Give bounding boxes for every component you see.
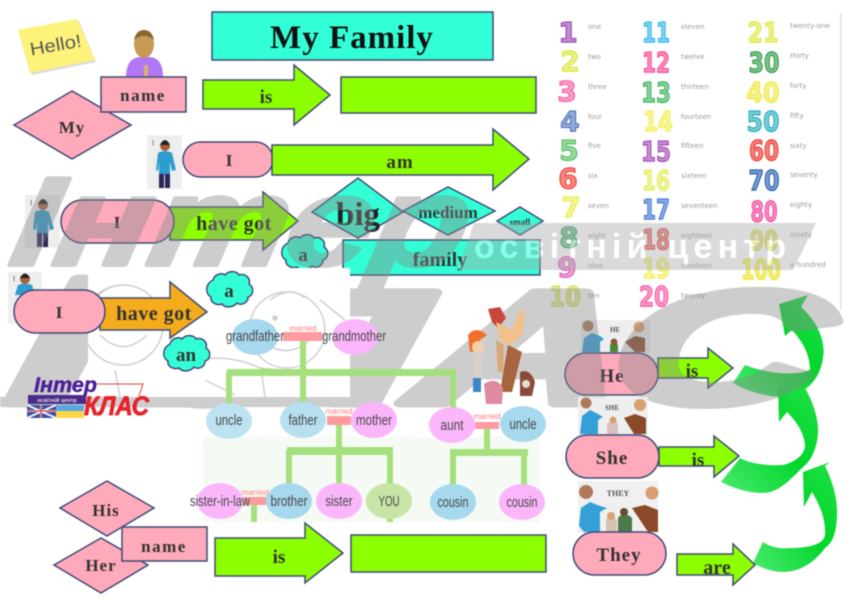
numbers: 21 to 100: ninety (790, 231, 812, 239)
numbers: 21 to 100: fifty (790, 112, 804, 120)
numbers: 21 to 100: seventy (790, 171, 818, 179)
arrow: is: is (260, 87, 272, 108)
number chart (549, 13, 842, 313)
node: YOU: YOU (378, 494, 400, 510)
numbers: 1 to 10: one (588, 23, 601, 31)
shape: I pill (14, 290, 105, 333)
numbers: 21 to 100: 90 (750, 224, 778, 257)
cloud: a: a (224, 281, 234, 302)
numbers: 21 to 100: 70 (748, 164, 780, 197)
cloud: an: an (176, 345, 196, 366)
numbers: 11 to 20: eleven (681, 23, 704, 31)
white backing of the baby sketch over the watermark (88, 268, 350, 397)
numbers: 11 to 20: 19 (642, 252, 670, 285)
picture: HE: HE (610, 326, 620, 334)
sticky note: Hello (18, 19, 96, 75)
node: uncle (500, 406, 546, 442)
cloud: a (207, 272, 253, 307)
numbers: 1 to 10: eight (588, 232, 606, 240)
icon: boy in blue (8, 272, 42, 324)
numbers: 11 to 20: 17 (642, 193, 670, 226)
numbers: 1 to 10: nine (588, 262, 603, 270)
numbers: 1 to 10: 2 (560, 45, 580, 78)
label: married: married (289, 324, 317, 333)
node: mother: mother (356, 413, 392, 429)
numbers: 21 to 100: eighty (790, 201, 812, 209)
picture: THEY (578, 481, 658, 533)
numbers: 11 to 20: 12 (642, 46, 670, 79)
numbers: 1 to 10: four (588, 113, 602, 121)
arrow: curved top (733, 295, 824, 397)
shape: I pill: I (226, 151, 233, 170)
shape: They pill (573, 532, 666, 575)
arrow: am (272, 129, 529, 190)
numbers: 1 to 10: two (588, 53, 601, 61)
arrow: have got (170, 192, 298, 250)
node: grandfather (226, 319, 284, 355)
picture: SHE: SHE (605, 404, 619, 412)
node: sister (316, 483, 362, 519)
numbers: 21 to 100: thirty (790, 52, 809, 60)
shape: name box (101, 77, 186, 112)
shape: He pill: He (599, 366, 625, 387)
numbers: 11 to 20: thirteen (681, 83, 709, 91)
numbers: 11 to 20: twenty (681, 292, 705, 300)
arrow: is: is (273, 547, 285, 568)
numbers: 21 to 100: 100 (741, 253, 781, 286)
node: uncle: uncle (216, 413, 242, 429)
numbers: 1 to 10: 4 (560, 105, 580, 138)
numbers: 1 to 10: 5 (559, 134, 579, 167)
watermark: Inter Klas: К ЛАС (0, 241, 852, 442)
numbers: 11 to 20: twelve (681, 53, 704, 61)
numbers: 21 to 100: sixty (790, 142, 807, 150)
arrow: is: is (692, 450, 704, 471)
watermark: Inter Klas (0, 151, 852, 442)
shape: My diamond (14, 91, 131, 159)
arrow: curved middle (721, 387, 818, 493)
pronoun: She (566, 397, 739, 478)
cloud: a (282, 235, 328, 270)
numbers: 21 to 100: 21 (748, 16, 778, 49)
node: sister: sister (326, 494, 353, 510)
icon: person with purple shirt (126, 30, 163, 77)
shape: Her diamond: Her (85, 556, 117, 575)
shape: name box: name (141, 537, 187, 556)
icon: boy in blue: I (13, 275, 16, 283)
icon: boy in blue: I (152, 139, 155, 147)
arrow: is (203, 65, 330, 125)
numbers: 11 to 20: 13 (641, 76, 671, 109)
shape: They pill: They (596, 545, 642, 566)
arrow: have got orange (100, 282, 207, 338)
numbers: 1 to 10 (549, 16, 609, 313)
node: cousin (499, 484, 545, 520)
numbers: 11 to 20: 11 (642, 16, 670, 49)
shape: family box (343, 240, 540, 275)
shape: small diamond: small (510, 217, 531, 227)
numbers: 11 to 20: 16 (642, 164, 670, 197)
icon: boy in blue (25, 195, 60, 248)
numbers: 21 to 100: a hundred (790, 261, 826, 269)
numbers: 1 to 10: 10 (549, 280, 581, 313)
pronoun: He (565, 320, 733, 395)
arrow: have got: have got (196, 213, 272, 235)
numbers: 1 to 10: 8 (559, 221, 579, 254)
watermark: Inter Klas: освітній центр (474, 228, 786, 266)
illustration: cartoon family (468, 307, 535, 404)
node: father (280, 402, 326, 438)
numbers: 21 to 100 (741, 16, 830, 286)
node: father: father (288, 413, 318, 429)
numbers: 1 to 10: five (588, 142, 601, 150)
cloud: an (164, 336, 210, 371)
node: cousin (430, 484, 476, 520)
numbers: 1 to 10: six (588, 172, 598, 180)
numbers: 21 to 100: 40 (746, 76, 780, 109)
arrow: is (658, 348, 733, 388)
shape: family box: family (413, 249, 467, 271)
node: grandmother: grandmother (322, 329, 386, 345)
row: His / Her name is (54, 481, 546, 593)
label: married: married (241, 488, 269, 497)
shape: I pill: I (56, 303, 63, 322)
label: married: married (473, 412, 501, 421)
numbers: 11 to 20 (639, 16, 718, 313)
arrow: is (215, 523, 343, 583)
shape: I pill (61, 200, 174, 243)
logo: Inter Klas: КЛАС (84, 391, 149, 421)
logo: Inter Klas (27, 374, 149, 421)
shape: name box: name (120, 86, 166, 105)
numbers: 11 to 20: fourteen (681, 113, 711, 121)
logo: Inter Klas: Інтер (34, 374, 97, 397)
node: grandmother (322, 319, 386, 355)
row: My name is (14, 65, 536, 159)
shape: Her diamond (54, 538, 148, 593)
shape: I pill (183, 142, 273, 177)
logo: Inter Klas: освітній центр (37, 397, 77, 404)
row: I am (147, 129, 529, 190)
numbers: 21 to 100: 30 (748, 46, 780, 79)
shape: medium diamond: medium (418, 203, 478, 222)
title: My Family (270, 20, 434, 56)
node: aunt: aunt (440, 418, 464, 434)
node: cousin: cousin (438, 495, 468, 511)
shape: His diamond: His (92, 501, 120, 520)
shape: I pill: I (114, 213, 121, 232)
picture: THEY: THEY (607, 489, 630, 498)
picture: HE (581, 320, 650, 353)
numbers: 1 to 10: 7 (561, 191, 581, 224)
illustration: baby sketch (83, 285, 345, 397)
shape: name box (122, 527, 207, 561)
numbers: 1 to 10: 6 (558, 162, 578, 195)
cloud: a: a (298, 245, 308, 266)
numbers: 1 to 10: three (588, 83, 607, 91)
pronoun: They (573, 481, 755, 585)
arrow: curved bottom (753, 462, 837, 572)
row: I have got a / an (8, 272, 253, 371)
node: sister-in-law (190, 483, 250, 519)
sticky note: Hello: Hello! (28, 31, 83, 59)
node: sister-in-law: sister-in-law (190, 494, 250, 510)
node: cousin: cousin (506, 495, 538, 511)
shape: My diamond: My (59, 118, 85, 137)
numbers: 11 to 20: 20 (639, 280, 669, 313)
numbers: 21 to 100: 80 (750, 195, 778, 228)
numbers: 1 to 10: 9 (557, 251, 577, 284)
node: mother (351, 402, 397, 438)
shape: medium diamond (403, 187, 495, 235)
node: uncle (206, 403, 252, 439)
numbers: 21 to 100: 60 (749, 134, 779, 167)
numbers: 11 to 20: fifteen (681, 142, 704, 150)
numbers: 11 to 20: 14 (643, 105, 673, 138)
title (212, 12, 493, 60)
shape: small diamond (497, 207, 543, 235)
shape: She pill: She (596, 448, 628, 469)
shape: His diamond (60, 481, 154, 536)
numbers: 11 to 20: eighteen (681, 232, 712, 240)
numbers: 21 to 100: forty (790, 82, 807, 90)
numbers: 11 to 20: sixteen (681, 172, 707, 180)
node: uncle: uncle (510, 417, 536, 433)
picture: SHE (578, 397, 648, 435)
pale panel behind the family tree (203, 437, 540, 522)
curved arrows (721, 295, 837, 572)
shape: He pill (565, 353, 658, 395)
blank green box (341, 77, 536, 113)
shape: She pill (566, 435, 659, 478)
arrow: have got orange: have got (116, 303, 192, 325)
node: brother (266, 483, 312, 519)
arrow: are: are (703, 557, 731, 579)
blank green box (351, 535, 546, 572)
label: married: married (325, 407, 353, 416)
arrow: is: is (686, 361, 698, 382)
node: aunt (429, 407, 475, 443)
watermark: Inter Klas: Інтер (2, 151, 484, 292)
numbers: 1 to 10: ten (588, 292, 600, 300)
arrow: are (677, 544, 755, 585)
arrow: am: am (386, 152, 414, 173)
numbers: 1 to 10: 3 (557, 75, 577, 108)
node: grandfather: grandfather (226, 329, 284, 345)
numbers: 21 to 100: 50 (746, 105, 780, 138)
shape: big diamond (312, 178, 403, 238)
numbers: 11 to 20: seventeen (681, 202, 718, 210)
numbers: 1 to 10: seven (588, 202, 609, 210)
icon: boy in blue: I (30, 199, 33, 207)
arrow: is (659, 436, 739, 477)
numbers: 11 to 20: nineteen (681, 262, 712, 270)
node: brother: brother (270, 494, 308, 510)
numbers: 11 to 20: 15 (641, 135, 671, 168)
numbers: 21 to 100: twenty-one (790, 22, 830, 30)
numbers: 11 to 20: 18 (642, 223, 670, 256)
numbers: 1 to 10: 1 (558, 16, 578, 49)
shape: big diamond: big (336, 197, 381, 233)
family tree (190, 319, 546, 522)
row: I have got a big family (25, 178, 543, 275)
icon: boy in blue (147, 135, 182, 189)
node: YOU (366, 483, 412, 519)
